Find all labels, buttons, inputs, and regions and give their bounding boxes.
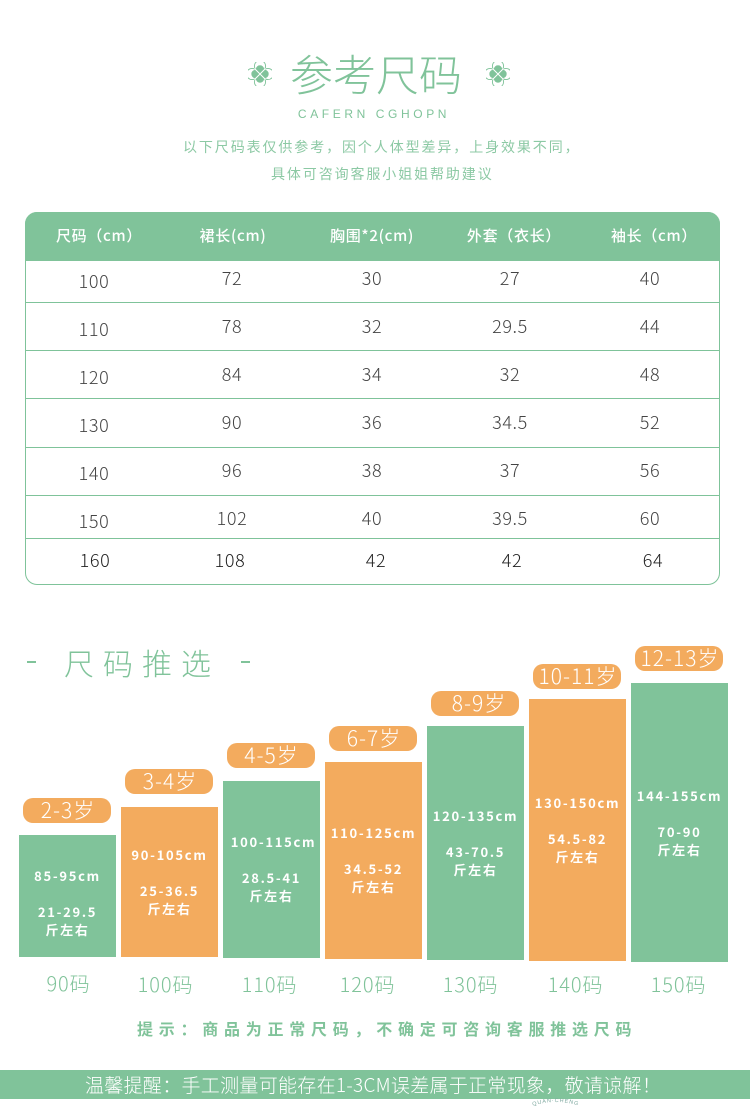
table values: 78 xyxy=(222,313,242,339)
panel: size table xyxy=(25,212,720,585)
bar 90 xyxy=(19,795,116,997)
header: size: 尺码（cm） xyxy=(56,225,142,246)
bar 100: 25-36.5 xyxy=(140,881,199,900)
table values: 38 xyxy=(362,457,382,483)
table values: 36 xyxy=(362,409,382,435)
bar 140: 54.5-82 xyxy=(548,829,607,848)
bar 120: 斤左右 xyxy=(351,877,396,896)
bar 90: 21-29.5 xyxy=(38,902,97,921)
icon: right clover xyxy=(486,62,510,86)
size label: 130码 xyxy=(443,969,498,998)
bar 150: 144-155cm xyxy=(637,786,722,805)
bar 130: 120-135cm xyxy=(433,806,518,825)
table values: 34.5 xyxy=(492,409,528,435)
age pill: 6-7岁 xyxy=(347,723,401,753)
table values: 150 xyxy=(79,508,109,534)
bar fill xyxy=(325,762,422,959)
brand mark: QUAN·CHENG xyxy=(532,1098,578,1106)
table values: 32 xyxy=(500,361,520,387)
bar 120: 34.5-52 xyxy=(344,859,403,878)
bar 110: 斤左右 xyxy=(249,886,294,905)
table values: 40 xyxy=(362,505,382,531)
table values: 102 xyxy=(217,505,247,531)
table values: 60 xyxy=(640,505,660,531)
bar 100: 90-105cm xyxy=(131,845,208,864)
table values: 42 xyxy=(502,547,522,573)
header: chest: 胸围*2(cm) xyxy=(330,225,414,246)
bar 150 xyxy=(631,643,728,998)
age pill: 2-3岁 xyxy=(41,795,95,825)
bar 100: 斤左右 xyxy=(147,899,192,918)
footer band xyxy=(0,1070,750,1099)
tip text: 提示：商品为正常尺码，不确定可咨询客服推选尺码 xyxy=(137,1016,637,1040)
bar 130: 43-70.5 xyxy=(446,842,505,861)
table values: 110 xyxy=(79,316,109,342)
table values: 108 xyxy=(215,547,245,573)
age pill xyxy=(329,726,417,751)
table values: 90 xyxy=(222,409,242,435)
bar fill xyxy=(121,807,218,957)
bar 130 xyxy=(427,688,524,998)
age pill: 10-11岁 xyxy=(539,661,617,691)
table values: 37 xyxy=(500,457,520,483)
size label: 150码 xyxy=(651,969,706,998)
age pill: 4-5岁 xyxy=(244,740,299,770)
header: skirt length: 裙长(cm) xyxy=(200,225,266,246)
table values: 27 xyxy=(500,265,520,291)
table values: 39.5 xyxy=(492,505,528,531)
bar 100 xyxy=(121,766,218,998)
bar 90: 85-95cm xyxy=(34,866,101,885)
size label: 140码 xyxy=(548,969,603,998)
bar 120: 110-125cm xyxy=(331,823,416,842)
bar 110: 100-115cm xyxy=(231,832,316,851)
intro text line 2: 具体可咨询客服小姐姐帮助建议 xyxy=(271,164,494,184)
size label: 90码 xyxy=(46,968,91,997)
footer text: 温馨提醒：手工测量可能存在1-3CM误差属于正常现象，敬请谅解！ xyxy=(85,1071,661,1098)
table values: 40 xyxy=(640,265,660,291)
bar fill xyxy=(19,835,116,957)
table values: 64 xyxy=(643,547,663,573)
age pill: 3-4岁 xyxy=(143,766,197,796)
table values: 42 xyxy=(366,547,386,573)
age pill: 12-13岁 xyxy=(641,643,719,673)
bar 130: 斤左右 xyxy=(453,860,498,879)
bar 90: 斤左右 xyxy=(45,920,90,939)
table values: 120 xyxy=(79,364,109,390)
table values: 130 xyxy=(79,412,109,438)
age pill xyxy=(431,691,519,716)
bar 120 xyxy=(325,723,422,998)
section heading: 尺码推选 xyxy=(64,640,220,684)
size label: 100码 xyxy=(138,969,193,998)
bar 150: 70-90 xyxy=(658,822,702,841)
age pill: 8-9岁 xyxy=(452,688,506,718)
bar fill xyxy=(427,726,524,960)
header: coat: 外套（衣长） xyxy=(467,225,561,246)
subtitle: CAFERN CGHOPN xyxy=(298,107,450,121)
table values: 84 xyxy=(222,361,242,387)
intro text line 1: 以下尺码表仅供参考，因个人体型差异，上身效果不同， xyxy=(183,137,580,157)
bar 140: 斤左右 xyxy=(555,847,600,866)
table values: 72 xyxy=(222,265,242,291)
table values: 30 xyxy=(362,265,382,291)
age pill xyxy=(227,743,315,768)
table values xyxy=(79,265,663,573)
size label: 110码 xyxy=(242,969,297,998)
bar 110: 28.5-41 xyxy=(242,868,301,887)
size label: 120码 xyxy=(340,969,395,998)
bar fill xyxy=(223,781,320,958)
bar 140: 130-150cm xyxy=(535,793,620,812)
bar 150: 斤左右 xyxy=(657,840,702,859)
header: sleeve: 袖长（cm） xyxy=(611,225,697,246)
table values: 29.5 xyxy=(492,313,528,339)
table values: 48 xyxy=(640,361,660,387)
table values: 52 xyxy=(640,409,660,435)
table values: 100 xyxy=(79,268,109,294)
table values: 56 xyxy=(640,457,660,483)
table values: 34 xyxy=(362,361,382,387)
bar fill xyxy=(529,699,626,961)
table values: 96 xyxy=(222,457,242,483)
table header bar xyxy=(25,212,720,261)
table values: 140 xyxy=(79,460,109,486)
icon: left clover xyxy=(248,62,272,86)
table values: 32 xyxy=(362,313,382,339)
table values: 160 xyxy=(80,547,110,573)
bar fill xyxy=(631,683,728,962)
age pill xyxy=(23,798,111,823)
bar 140 xyxy=(529,661,626,998)
age pill xyxy=(125,769,213,794)
bar 110 xyxy=(223,740,320,998)
table values: 44 xyxy=(640,313,660,339)
title: 参考尺码 xyxy=(290,42,462,104)
